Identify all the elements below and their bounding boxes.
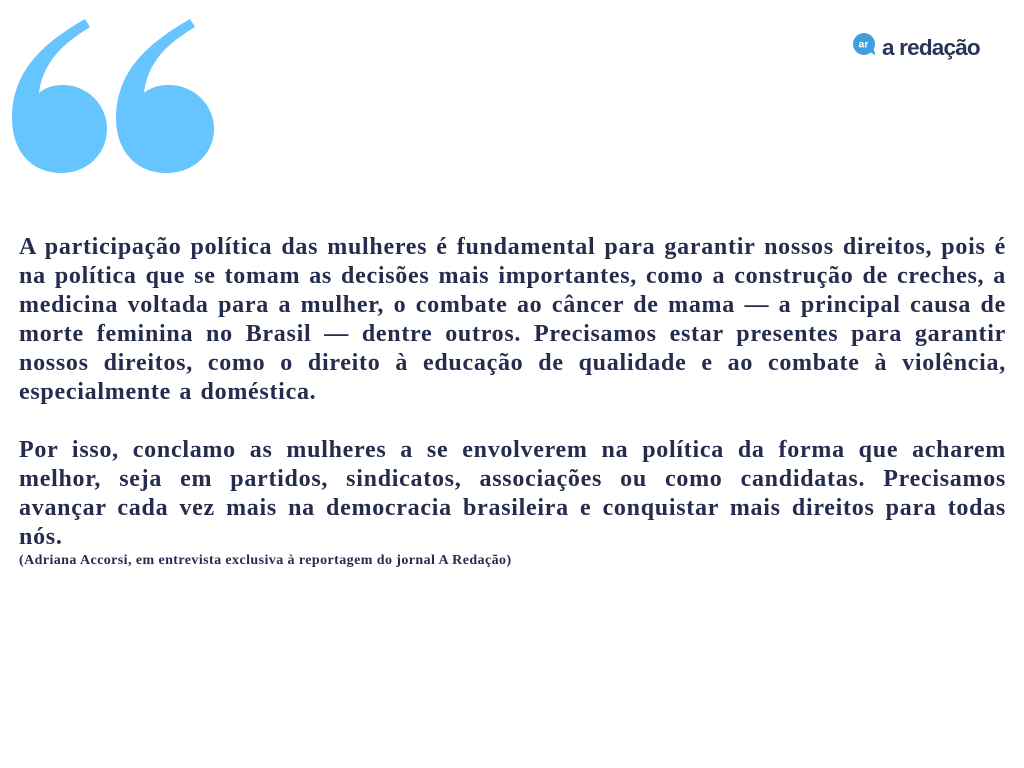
logo: a redação: [853, 33, 980, 60]
text block: first paragraph: especialmente a doméstica.: [19, 379, 316, 405]
text block: second paragraph: nós.: [19, 524, 63, 550]
text block: second paragraph: Por isso, conclamo as mulheres a se envolverem na política da forma que acharem: [19, 437, 1006, 463]
text block: first paragraph: morte feminina no Brasil — dentre outros. Precisamos estar presentes para garantir: [19, 321, 1006, 347]
attribution caption: (Adriana Accorsi, em entrevista exclusiva à reportagem do jornal A Redação): [19, 553, 512, 568]
text block: second paragraph: avançar cada vez mais na democracia brasileira e conquistar mais direitos para todas: [19, 495, 1006, 521]
text block: first paragraph: nossos direitos, como o direito à educação de qualidade e ao combate à violência,: [19, 350, 1006, 376]
logo wordmark: a redação: [882, 35, 980, 60]
text block: first paragraph: [19, 234, 1006, 405]
text block: first paragraph: na política que se tomam as decisões mais importantes, como a construção de creches, a: [19, 263, 1006, 289]
text block: second paragraph: melhor, seja em partidos, sindicatos, associações ou como candidatas. Precisamos: [19, 466, 1006, 492]
icon: logo speech bubble: ar: [859, 38, 868, 50]
text block: first paragraph: A participação política das mulheres é fundamental para garantir nossos direitos, pois é: [19, 234, 1006, 260]
text block: first paragraph: medicina voltada para a mulher, o combate ao câncer de mama — a principal causa de: [19, 292, 1006, 318]
icon: quotation marks: [12, 19, 214, 173]
text block: second paragraph: [19, 437, 1006, 550]
icon: logo speech bubble: [853, 33, 876, 56]
